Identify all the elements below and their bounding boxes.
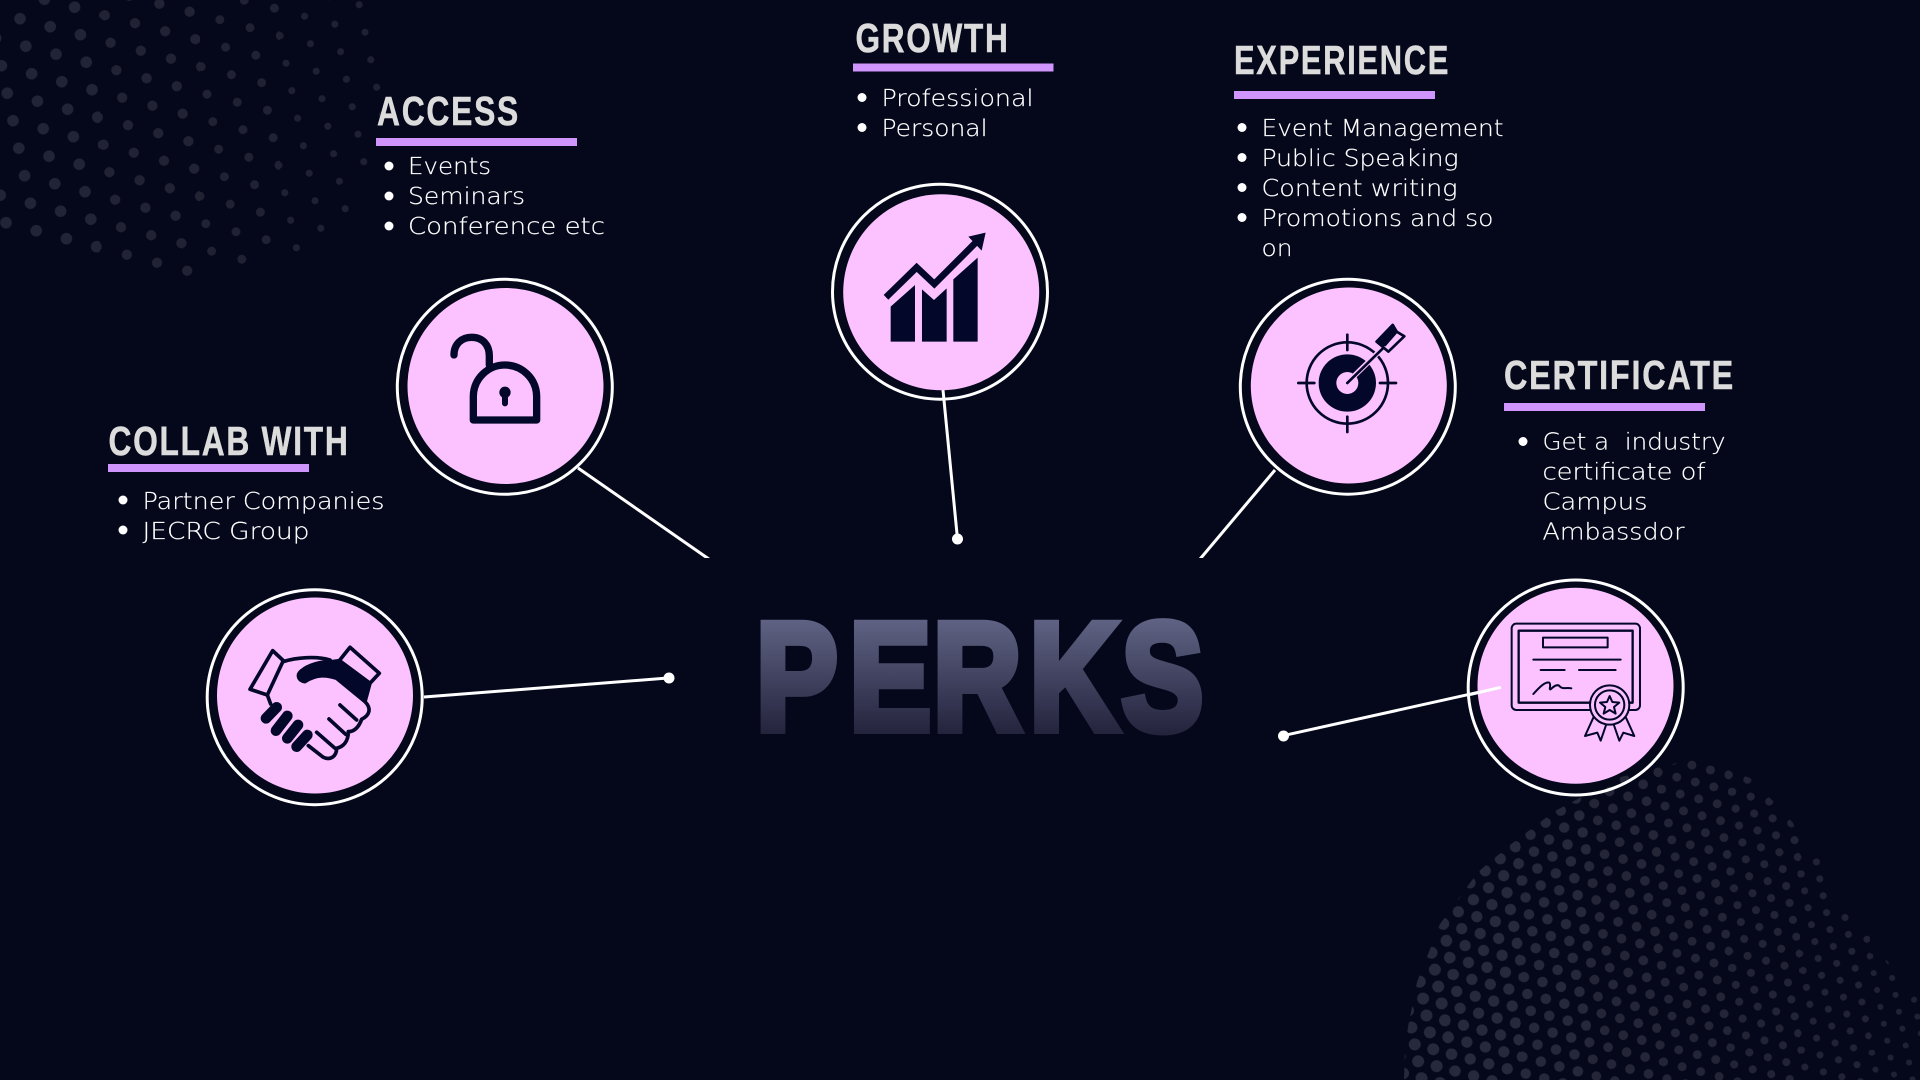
- list: [858, 86, 1034, 142]
- list: JECRC Group: [142, 519, 310, 545]
- list: [384, 154, 605, 240]
- underline: [1504, 403, 1705, 411]
- node circle: [832, 184, 1048, 399]
- icon: handshake: [250, 647, 379, 758]
- list: Content writing: [1262, 176, 1458, 202]
- panel: collab with: [108, 418, 422, 805]
- panel: certificate: [1468, 352, 1735, 795]
- list: Conference etc: [408, 214, 605, 240]
- list: [1238, 116, 1504, 262]
- icon: open padlock: [454, 337, 537, 420]
- list: Personal: [882, 116, 988, 142]
- list: Ambassdor: [1542, 520, 1685, 546]
- list: Public Speaking: [1262, 146, 1458, 172]
- icon: certificate with medal: [1512, 624, 1640, 741]
- panel: access: [376, 88, 612, 494]
- dot pattern: top left: [0, 0, 390, 290]
- list: Partner Companies: [142, 489, 384, 515]
- list: Events: [408, 154, 491, 180]
- heading: collab with: COLLAB WITH: [108, 418, 350, 464]
- list: Get a industry: [1542, 430, 1726, 456]
- list: Promotions and so: [1262, 206, 1494, 232]
- heading: access: ACCESS: [377, 88, 520, 134]
- list: Event Management: [1262, 116, 1504, 142]
- heading: growth: GROWTH: [856, 15, 1010, 61]
- underline: [853, 64, 1054, 72]
- icon: growth chart: [886, 233, 986, 342]
- node circle: [397, 279, 612, 494]
- node circle: [207, 590, 422, 805]
- node circle: [1240, 279, 1455, 494]
- list: Seminars: [408, 184, 525, 210]
- connector lines: access and experience: [578, 468, 1275, 565]
- list: [1518, 430, 1726, 546]
- underline: [108, 464, 309, 472]
- panel: experience: [1234, 37, 1504, 494]
- icon: target with arrow: [1298, 325, 1404, 432]
- list: certificate of: [1542, 460, 1706, 486]
- underline: [1234, 91, 1435, 99]
- panel: growth: [832, 15, 1054, 399]
- heading: certificate: CERTIFICATE: [1504, 352, 1735, 398]
- node circle: [1468, 580, 1683, 795]
- title backdrop: [680, 558, 1280, 798]
- dot pattern: bottom right: [1400, 750, 1920, 1080]
- list: on: [1262, 236, 1292, 262]
- underline: [376, 138, 577, 146]
- connector lines and dots: [424, 390, 1501, 742]
- center title: PERKS: PERKS: [756, 593, 1203, 763]
- heading: experience: EXPERIENCE: [1234, 37, 1450, 83]
- list: Campus: [1542, 490, 1648, 516]
- list: Professional: [882, 86, 1034, 112]
- list: [118, 489, 384, 545]
